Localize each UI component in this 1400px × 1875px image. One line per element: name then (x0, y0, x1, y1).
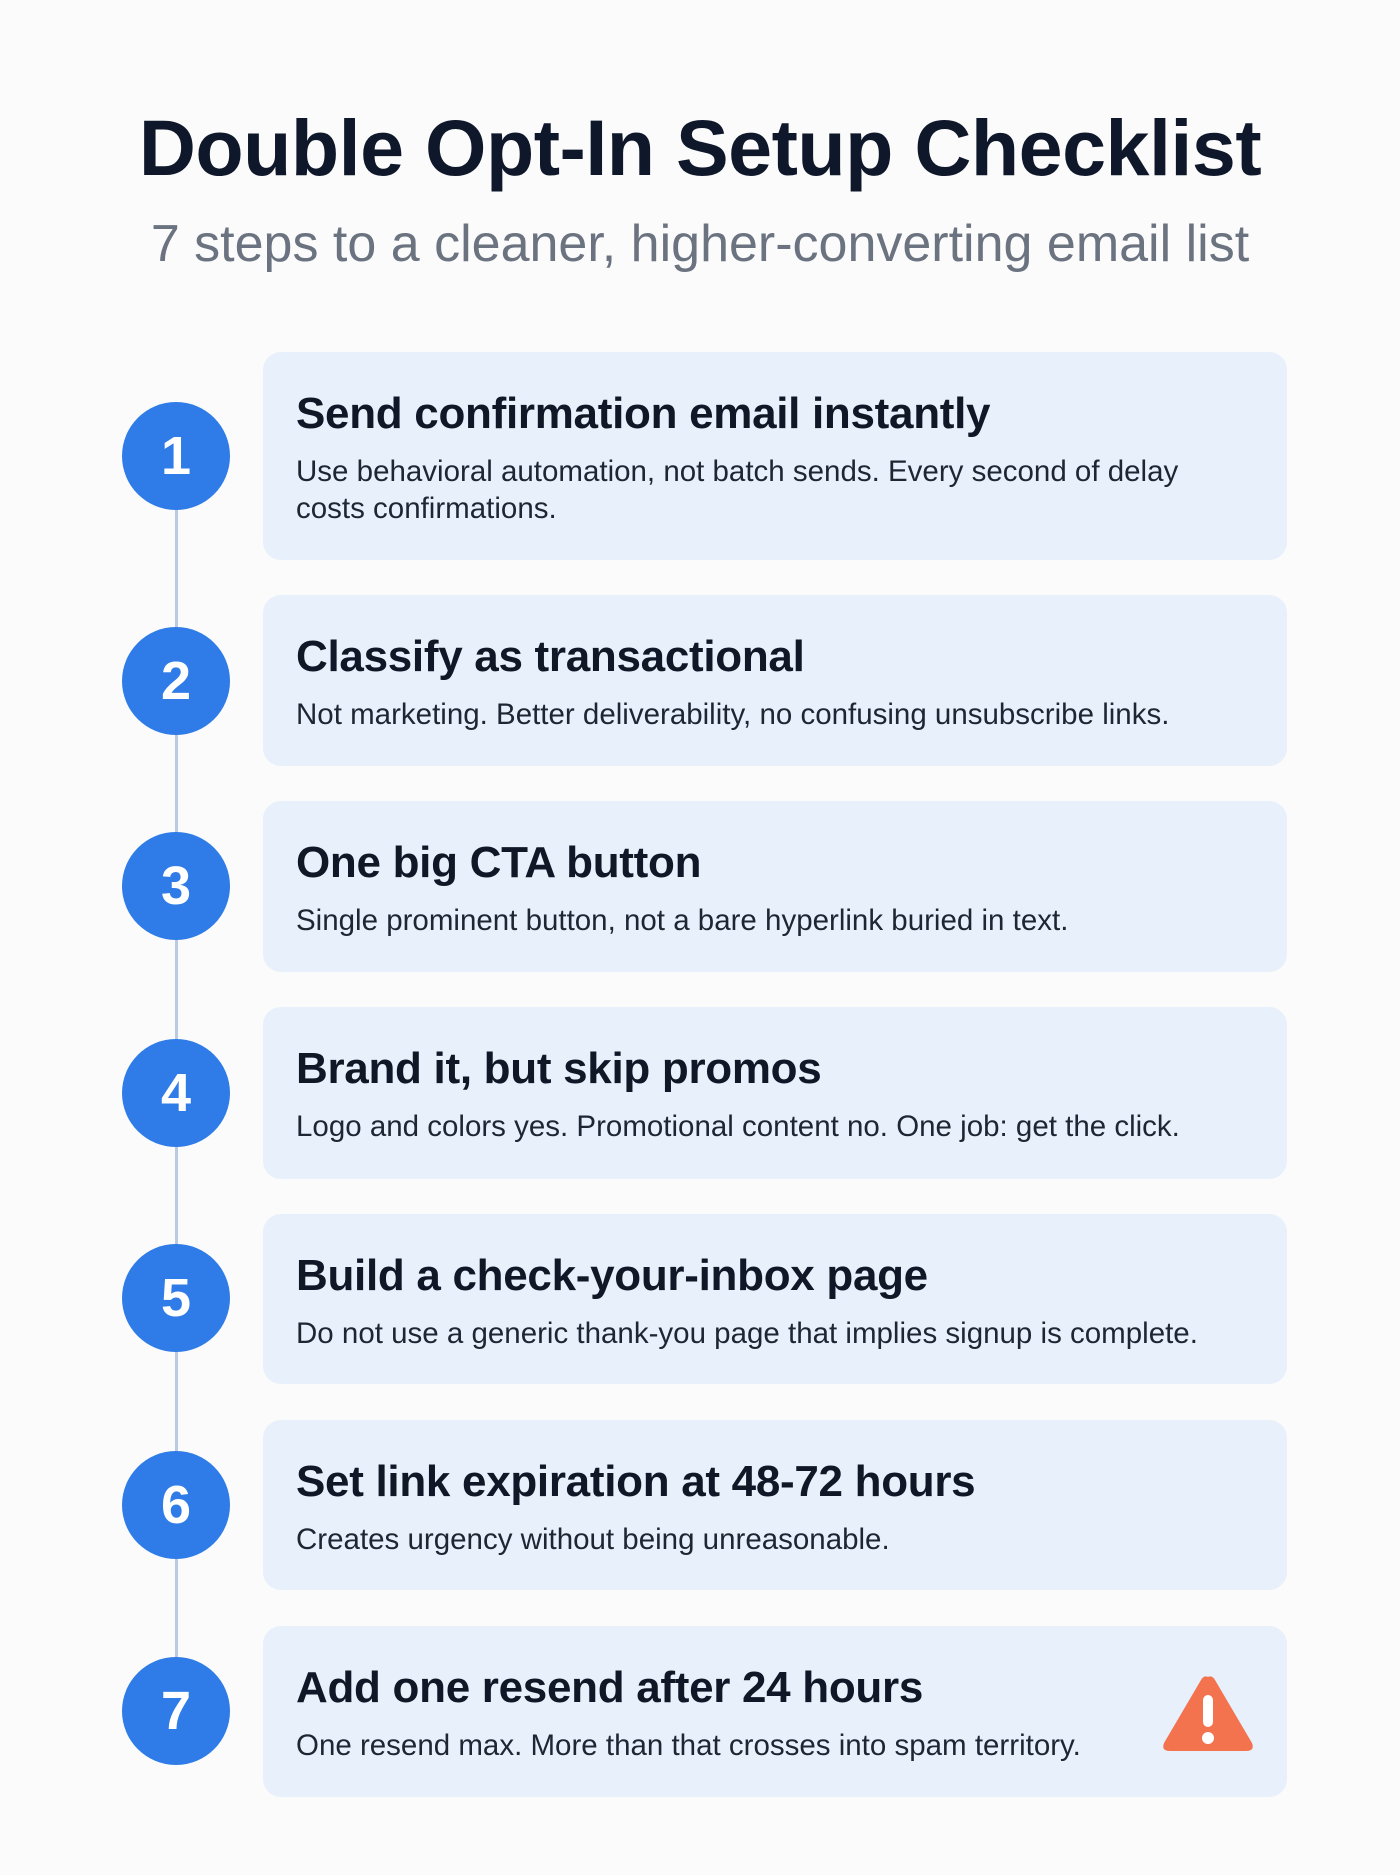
card 3: One big CTA button (296, 838, 701, 887)
card 1: Use behavioral automation, not batch sends. Every second of delay costs confirmations. (296, 455, 1178, 525)
step 1 (122, 402, 230, 510)
step 6 (122, 1451, 230, 1559)
card 2: Not marketing. Better deliverability, no confusing unsubscribe links. (296, 698, 1169, 731)
step 2 (122, 627, 230, 735)
step 7: 7 (161, 1681, 191, 1741)
card 5: Build a check-your-inbox page (296, 1251, 928, 1300)
subtitle: 7 steps to a cleaner, higher-converting email list (151, 215, 1249, 273)
card 6: Creates urgency without being unreasonable. (296, 1523, 890, 1556)
step 1: 1 (161, 426, 191, 486)
card 4: Logo and colors yes. Promotional content no. One job: get the click. (296, 1110, 1180, 1143)
card 6 (263, 1420, 1287, 1590)
card 4: Brand it, but skip promos (296, 1044, 821, 1093)
step 5 (122, 1244, 230, 1352)
icon: warning (1163, 1676, 1253, 1751)
card 2: Classify as transactional (296, 632, 805, 681)
step 5: 5 (161, 1268, 191, 1328)
card 3: Single prominent button, not a bare hyperlink buried in text. (296, 904, 1068, 937)
connector line (175, 456, 178, 1711)
card 7: Add one resend after 24 hours (296, 1663, 923, 1712)
step 4: 4 (161, 1063, 191, 1123)
step 4 (122, 1039, 230, 1147)
card 1: Send confirmation email instantly (296, 389, 990, 438)
step 3 (122, 832, 230, 940)
step 6: 6 (161, 1475, 191, 1535)
card 3 (263, 801, 1287, 972)
step 7 (122, 1657, 230, 1765)
card 1 (263, 352, 1287, 560)
card 7: One resend max. More than that crosses into spam territory. (296, 1729, 1081, 1762)
title: Double Opt-In Setup Checklist (139, 103, 1261, 192)
step 2: 2 (161, 651, 191, 711)
card 5: Do not use a generic thank-you page that implies signup is complete. (296, 1317, 1198, 1350)
card 4 (263, 1007, 1287, 1179)
step 3: 3 (161, 856, 191, 916)
card 6: Set link expiration at 48-72 hours (296, 1457, 975, 1506)
card 2 (263, 595, 1287, 766)
card 5 (263, 1214, 1287, 1384)
card 7 (263, 1626, 1287, 1797)
